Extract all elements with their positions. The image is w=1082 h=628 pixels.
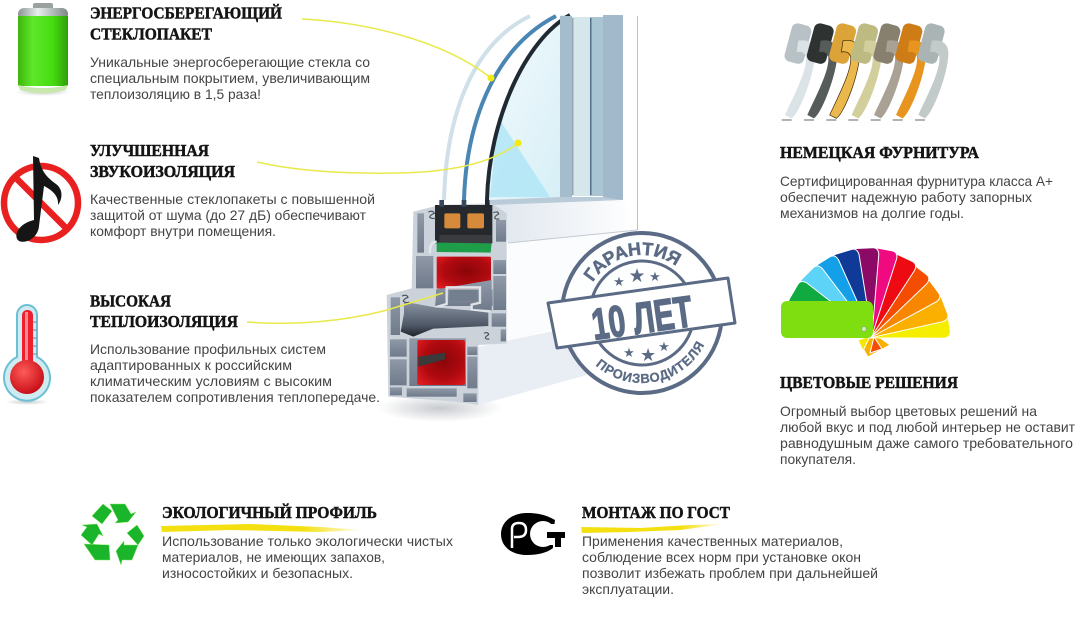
body text: позволит избежать проблем при дальнейшей	[582, 565, 878, 581]
body text: Использование профильных систем	[90, 341, 326, 357]
stamp stars: ★	[658, 340, 670, 355]
panel: german hardware	[780, 22, 1053, 221]
stamp stars	[613, 265, 670, 366]
glass panes interior	[444, 15, 638, 230]
red steel reinforcement lower	[417, 340, 465, 385]
body text: обеспечит надежную работу запорных	[780, 189, 1032, 205]
body text	[582, 533, 878, 597]
icon: recycling	[81, 504, 144, 565]
guarantee stamp	[546, 231, 736, 395]
profile cross section	[387, 200, 507, 405]
window profile illustration	[378, 15, 640, 422]
panel: colour solutions	[780, 247, 1076, 467]
stamp years: 10 ЛЕТ	[589, 287, 696, 350]
body text: адаптированных к российским	[90, 357, 292, 373]
body text: механизмов на долгие годы.	[780, 205, 964, 221]
body text: показателем сопротивления теплопередаче.	[90, 389, 380, 405]
body text: соблюдение всех норм при установке окон	[582, 549, 861, 565]
icon: no music	[4, 156, 78, 242]
body text	[162, 533, 453, 581]
heading: ВЫСОКАЯ	[90, 292, 171, 310]
heading: ЗВУКОИЗОЛЯЦИЯ	[90, 162, 235, 181]
stamp band	[548, 278, 735, 348]
icon: GOST mark	[501, 513, 565, 555]
body text: покупателя.	[780, 451, 856, 467]
leader lines	[247, 19, 522, 323]
glazing block with spacers	[430, 200, 492, 253]
body text: Применения качественных материалов,	[582, 533, 843, 549]
body text: Сертифицированная фурнитура класса А+	[780, 173, 1053, 189]
icon: battery	[15, 3, 71, 96]
body text: Огромный выбор цветовых решений на	[780, 403, 1037, 419]
body text	[90, 54, 370, 102]
heading: ТЕПЛОИЗОЛЯЦИЯ	[90, 312, 238, 331]
stamp stars: ★	[623, 346, 635, 361]
body text: защитой от шума (до 27 дБ) обеспечивают	[90, 207, 367, 223]
red steel reinforcement upper	[437, 257, 491, 289]
panel: eco profile	[81, 503, 453, 581]
shadow under profile	[378, 394, 502, 422]
body text	[90, 191, 375, 239]
body text: материалов, не имеющих запахов,	[162, 549, 385, 565]
heading: ЭКОЛОГИЧНЫЙ ПРОФИЛЬ	[162, 503, 377, 522]
heading: НЕМЕЦКАЯ ФУРНИТУРА	[780, 143, 980, 162]
heading	[90, 292, 238, 331]
panel: GOST installation	[501, 503, 878, 597]
stamp stars: ★	[613, 275, 625, 290]
body text: любой вкус и под любой интерьер не оставит	[780, 419, 1076, 435]
stamp stars: ★	[649, 270, 661, 285]
body text: климатическим условиям с высоким	[90, 373, 332, 389]
brush underline	[581, 524, 725, 533]
body text: теплоизоляцию в 1,5 раза!	[90, 86, 261, 102]
body text: равнодушным даже самого требовательного	[780, 435, 1073, 451]
stamp stars: ★	[640, 345, 656, 366]
body text: эксплуатации.	[582, 581, 674, 597]
body text	[780, 173, 1053, 221]
heading: СТЕКЛОПАКЕТ	[90, 24, 213, 44]
panel: energy saving glass	[15, 3, 370, 102]
body text	[780, 403, 1076, 467]
panel: thermal insulation	[4, 292, 380, 405]
stamp text: manufacturer: ПРОИЗВОДИТЕЛЯ	[596, 340, 704, 384]
body text	[90, 341, 380, 405]
brush underline	[161, 524, 365, 532]
heading: МОНТАЖ ПО ГОСТ	[582, 503, 731, 522]
heading: ЭНЕРГОСБЕРЕГАЮЩИЙ	[90, 4, 282, 22]
icon: window handles	[782, 22, 948, 121]
heading	[90, 4, 282, 44]
body text: Уникальные энергосберегающие стекла со	[90, 54, 370, 70]
main dark chamber	[401, 302, 488, 337]
body text: комфорт внутри помещения.	[90, 223, 276, 239]
inner notch	[435, 280, 492, 311]
heading	[90, 141, 235, 181]
icon: colour fan	[781, 247, 951, 357]
heading: ЦВЕТОВЫЕ РЕШЕНИЯ	[780, 373, 958, 392]
white extrusion sides	[478, 200, 640, 405]
body text: износостойких и безопасных.	[162, 565, 353, 581]
panel: sound insulation	[4, 141, 375, 242]
stamp text: guarantee: ГАРАНТИЯ	[583, 242, 682, 282]
corner clips	[402, 211, 499, 339]
body text: специальным покрытием, увеличивающим	[90, 70, 370, 86]
stamp stars: ★	[628, 265, 646, 287]
heading: УЛУЧШЕННАЯ	[90, 141, 209, 160]
body text: Качественные стеклопакеты с повышенной	[90, 191, 375, 207]
icon: thermometer	[4, 305, 50, 405]
body text: Использование только экологически чистых	[162, 533, 453, 549]
